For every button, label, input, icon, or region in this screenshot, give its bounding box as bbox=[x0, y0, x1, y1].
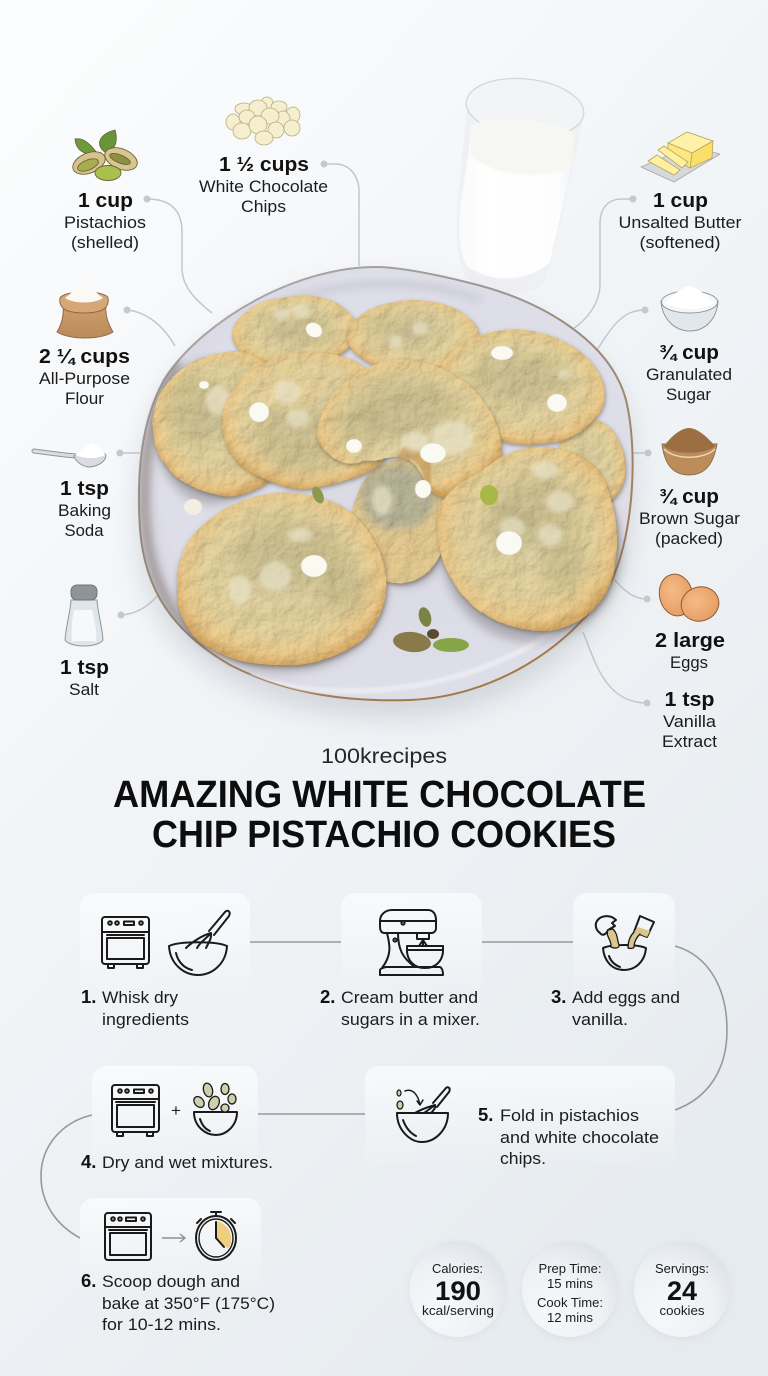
name: Salt bbox=[69, 681, 99, 699]
step text: and white chocolate bbox=[500, 1128, 659, 1147]
name line 2: Flour bbox=[65, 390, 105, 408]
amount: 2 large bbox=[655, 629, 725, 652]
step 5 bbox=[365, 1066, 675, 1170]
stat: servings bbox=[634, 1241, 730, 1338]
cookie: far right bbox=[547, 410, 637, 514]
cookie: far left bbox=[152, 352, 290, 496]
name: Baking bbox=[58, 502, 111, 520]
plate shadow bbox=[139, 283, 633, 716]
step text: ingredients bbox=[102, 1010, 189, 1029]
title bbox=[113, 774, 646, 856]
step 3 bbox=[551, 893, 680, 1029]
icon: eggs bbox=[655, 571, 723, 626]
icon: oven bbox=[105, 1213, 151, 1260]
icon: sugar bowl bbox=[661, 286, 718, 331]
step text: Cream butter and bbox=[341, 988, 478, 1007]
icon: spoon bbox=[34, 443, 106, 467]
note: (softened) bbox=[640, 234, 720, 252]
name: All-Purpose bbox=[39, 370, 130, 388]
icon: salt shaker bbox=[65, 585, 103, 646]
loose pistachios and chip bbox=[184, 485, 469, 654]
icon: oven bbox=[112, 1085, 159, 1136]
stat: prep and cook time: Cook Time: bbox=[537, 1295, 603, 1310]
icon: butter on dish bbox=[641, 132, 720, 182]
ingredient: brown sugar bbox=[639, 428, 741, 548]
amount: ¾ cup bbox=[659, 341, 719, 364]
connector lines bbox=[116, 160, 652, 706]
card bbox=[92, 1066, 258, 1166]
stat: servings: cookies bbox=[660, 1303, 705, 1318]
cookie: back left bbox=[231, 292, 359, 372]
step 1 bbox=[80, 893, 250, 1029]
plate bbox=[139, 267, 633, 700]
step text: bake at 350°F (175°C) bbox=[102, 1294, 275, 1313]
step text: 1. bbox=[81, 986, 96, 1007]
icon: brown sugar bowl bbox=[662, 428, 717, 475]
step 6 bbox=[80, 1198, 275, 1334]
stat: calories: 190 bbox=[435, 1276, 481, 1306]
stat: prep and cook time: 12 mins bbox=[547, 1310, 593, 1325]
ingredient: white chocolate chips bbox=[199, 97, 328, 216]
ingredient: butter bbox=[618, 132, 742, 252]
ingredient: eggs bbox=[655, 571, 725, 672]
card bbox=[80, 893, 250, 998]
step text: 5. bbox=[478, 1104, 493, 1125]
stat: calories: kcal/serving bbox=[422, 1303, 494, 1318]
icon: pistachios into bowl bbox=[192, 1082, 237, 1135]
note: (packed) bbox=[655, 530, 723, 548]
amount: 1 tsp bbox=[60, 656, 109, 679]
plus sign: + bbox=[171, 1101, 181, 1120]
icon: whisk and bowl bbox=[169, 911, 230, 975]
icon: folding whisk and bowl bbox=[397, 1087, 450, 1142]
icon: stand mixer bbox=[380, 910, 443, 975]
stat: calories: Calories: bbox=[432, 1261, 483, 1276]
flow connectors bbox=[41, 942, 727, 1238]
amount: ¾ cup bbox=[659, 485, 719, 508]
stat: calories bbox=[410, 1241, 506, 1338]
name: Brown Sugar bbox=[639, 510, 741, 528]
card bbox=[80, 1198, 261, 1293]
amount: 1 tsp bbox=[664, 688, 714, 711]
plate of cookies bbox=[139, 267, 637, 700]
cookie: back middle bbox=[347, 300, 479, 372]
icon: flour sack bbox=[57, 283, 113, 338]
stat: servings: 24 bbox=[667, 1276, 697, 1306]
milk glass bbox=[457, 73, 587, 293]
step text: sugars in a mixer. bbox=[341, 1010, 480, 1029]
step text bbox=[551, 986, 680, 1029]
stat: servings: Servings: bbox=[655, 1261, 709, 1276]
amount: 1 ½ cups bbox=[219, 153, 309, 176]
card bbox=[341, 893, 482, 998]
name line 2: Sugar bbox=[666, 386, 712, 404]
step text: Add eggs and bbox=[572, 988, 680, 1007]
step text: Dry and wet mixtures. bbox=[102, 1153, 273, 1172]
ingredient: baking soda bbox=[34, 443, 111, 540]
step text: Scoop dough and bbox=[102, 1272, 240, 1291]
ingredient: salt bbox=[60, 585, 109, 699]
name: Vanilla bbox=[663, 713, 717, 731]
step text bbox=[81, 986, 189, 1029]
step text: 3. bbox=[551, 986, 566, 1007]
ingredient: vanilla bbox=[662, 688, 717, 751]
name line 2: Extract bbox=[662, 733, 717, 751]
card bbox=[365, 1066, 675, 1170]
step text bbox=[81, 1270, 275, 1334]
name line 2: Soda bbox=[64, 522, 104, 540]
cookie: center left bbox=[222, 352, 392, 489]
step text: 2. bbox=[320, 986, 335, 1007]
step text: chips. bbox=[500, 1149, 546, 1168]
name: Unsalted Butter bbox=[618, 214, 742, 232]
name: Pistachios bbox=[64, 214, 146, 232]
step text: for 10-12 mins. bbox=[102, 1315, 221, 1334]
arrow bbox=[162, 1234, 185, 1242]
title: CHIP PISTACHIO COOKIES bbox=[152, 814, 616, 856]
stat: prep and cook time bbox=[522, 1241, 618, 1338]
step 4 bbox=[81, 1066, 273, 1172]
name: Granulated bbox=[646, 366, 732, 384]
amount: 1 tsp bbox=[60, 477, 109, 500]
cookie: bottom right bbox=[437, 447, 618, 631]
cookie: bottom left bbox=[176, 493, 386, 665]
cookie shadows bbox=[156, 360, 622, 672]
name line 2: Chips bbox=[241, 198, 286, 216]
icon: oven bbox=[102, 917, 149, 968]
stat: prep and cook time: Prep Time: bbox=[538, 1261, 602, 1276]
note: (shelled) bbox=[71, 234, 139, 252]
step text: 4. bbox=[81, 1151, 96, 1172]
cookie: middle bottom bbox=[352, 460, 448, 584]
step 2 bbox=[320, 893, 482, 1029]
ingredient: pistachios bbox=[64, 130, 146, 252]
cookie: center with bite bbox=[317, 360, 502, 498]
cookie: top right bbox=[430, 319, 612, 455]
name: Eggs bbox=[670, 654, 708, 672]
icon: eggs and vanilla into bowl bbox=[596, 916, 654, 970]
step text bbox=[478, 1104, 659, 1168]
step text: Fold in pistachios bbox=[500, 1106, 639, 1125]
title: AMAZING WHITE CHOCOLATE bbox=[113, 774, 646, 816]
amount: 1 cup bbox=[653, 189, 708, 212]
icon: pistachios bbox=[69, 130, 141, 180]
ingredient: flour bbox=[39, 283, 130, 408]
icon: stopwatch bbox=[196, 1212, 236, 1260]
amount: 1 cup bbox=[78, 189, 133, 212]
step text: vanilla. bbox=[572, 1010, 628, 1029]
step text: Whisk dry bbox=[102, 988, 178, 1007]
name: White Chocolate bbox=[199, 178, 328, 196]
amount: 2 ¼ cups bbox=[39, 345, 130, 368]
source name: 100krecipes bbox=[321, 745, 447, 768]
icon: white chips bbox=[226, 97, 300, 145]
card bbox=[573, 893, 675, 998]
stat: prep and cook time: 15 mins bbox=[547, 1276, 593, 1291]
ingredient: granulated sugar bbox=[646, 286, 732, 404]
step text bbox=[320, 986, 480, 1029]
step text: 6. bbox=[81, 1270, 96, 1291]
